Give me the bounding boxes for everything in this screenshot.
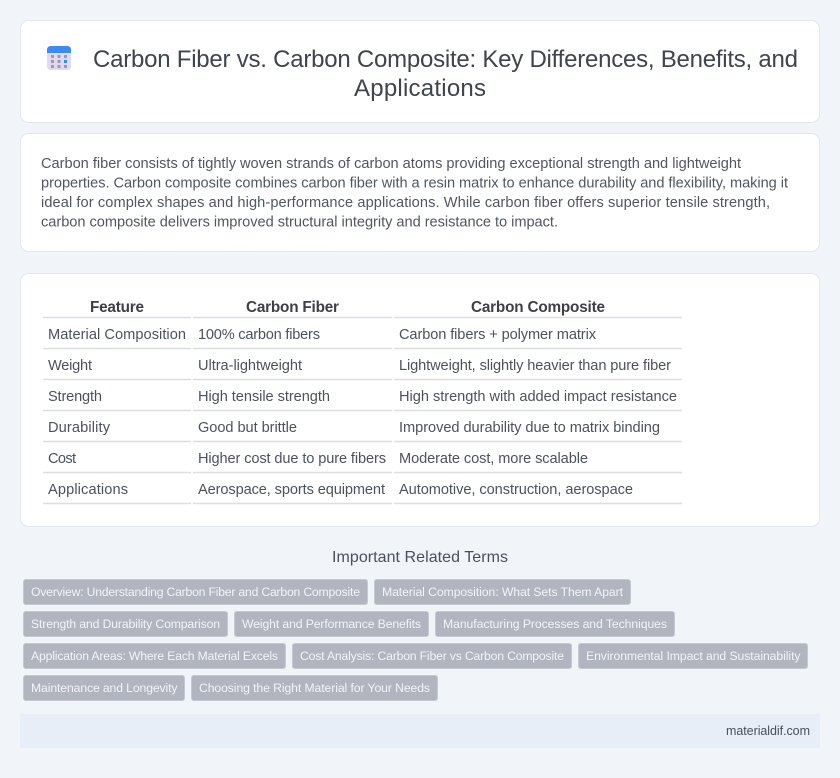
- tag: application areas: [24, 644, 286, 668]
- tag: material composition: [374, 580, 630, 604]
- text block: introduction: carbon composite delivers improved structural integrity and resistance to impact.: [41, 214, 558, 230]
- table row: cost: [48, 451, 588, 467]
- table row: weight: Lightweight, slightly heavier than pure fiber: [399, 358, 671, 374]
- table row: material composition: [48, 327, 597, 343]
- tag: maintenance: [24, 676, 184, 700]
- tag: choosing material: Choosing the Right Material for Your Needs: [199, 681, 430, 695]
- panel: header: [20, 20, 820, 122]
- tag: choosing material: [192, 676, 438, 700]
- table header row: Feature: [90, 299, 144, 316]
- tag: application areas: Application Areas: Where Each Material Excels: [31, 649, 278, 663]
- table header row: [90, 299, 605, 316]
- table row: material composition: Material Composition: [48, 327, 186, 343]
- table row: durability: Durability: [48, 420, 111, 436]
- tag: maintenance: Maintenance and Longevity: [31, 681, 178, 695]
- table row: strength: High strength with added impact resistance: [399, 389, 677, 405]
- title: Applications: [354, 75, 486, 102]
- table row: strength: [48, 389, 677, 405]
- table header row: Carbon Fiber: [246, 299, 339, 316]
- icon: calendar grid: [47, 46, 71, 70]
- table row: applications: Aerospace, sports equipment: [198, 482, 385, 498]
- table row: cost: Cost: [48, 451, 76, 467]
- panel: introduction paragraph: [20, 134, 820, 252]
- table row: material composition: 100% carbon fibers: [198, 327, 320, 343]
- table row: cost: Higher cost due to pure fibers: [198, 451, 386, 467]
- table row: durability: Improved durability due to matrix binding: [399, 420, 660, 436]
- title: [93, 46, 798, 102]
- heading: important related terms: Important Related Terms: [332, 549, 508, 566]
- table row: material composition: Carbon fibers + polymer matrix: [399, 327, 597, 343]
- panel: comparison table: [20, 274, 820, 526]
- table row: weight: [48, 358, 671, 374]
- text block: introduction: properties. Carbon composite combines carbon fiber with a resin matrix to enhance durability and flexibility, making it: [41, 176, 788, 192]
- tag: weight and performance: [234, 612, 428, 636]
- table row: strength: High tensile strength: [198, 389, 330, 405]
- tag: environmental impact: [578, 644, 808, 668]
- table header row: Carbon Composite: [471, 299, 605, 316]
- table row: durability: Good but brittle: [198, 420, 297, 436]
- table row: durability: [48, 420, 660, 436]
- tag: strength and durability: [24, 612, 228, 636]
- tag: overview: [24, 580, 368, 604]
- text block: introduction: ideal for complex shapes and high-performance applications. While carbon fiber offers superior tensile strength,: [41, 195, 770, 211]
- tag: overview: Overview: Understanding Carbon Fiber and Carbon Composite: [31, 585, 360, 599]
- footer bar: [20, 714, 820, 748]
- tag: cost analysis: Cost Analysis: Carbon Fiber vs Carbon Composite: [300, 649, 564, 663]
- text block: introduction: [41, 156, 788, 230]
- tag: strength and durability: Strength and Durability Comparison: [31, 617, 220, 631]
- tag: weight and performance: Weight and Performance Benefits: [242, 617, 421, 631]
- table row: weight: Ultra-lightweight: [198, 358, 302, 374]
- title: Carbon Fiber vs. Carbon Composite: Key Differences, Benefits, and: [93, 46, 798, 73]
- table row: cost: Moderate cost, more scalable: [399, 451, 588, 467]
- footer text: site name: materialdif.com: [726, 724, 810, 738]
- table row: weight: Weight: [48, 358, 92, 374]
- table row: applications: Automotive, construction, aerospace: [399, 482, 633, 498]
- text block: introduction: Carbon fiber consists of tightly woven strands of carbon atoms providing exceptional strength and lightweight: [41, 156, 741, 172]
- tag: manufacturing: Manufacturing Processes and Techniques: [443, 617, 667, 631]
- tag: material composition: Material Composition: What Sets Them Apart: [382, 585, 624, 599]
- tag: manufacturing: [436, 612, 674, 636]
- tag group: related terms: [24, 580, 808, 700]
- table row: applications: [48, 482, 633, 498]
- tag: environmental impact: Environmental Impact and Sustainability: [586, 649, 801, 663]
- tag: cost analysis: [292, 644, 572, 668]
- table row: strength: Strength: [48, 389, 102, 405]
- table row: applications: Applications: [48, 482, 128, 498]
